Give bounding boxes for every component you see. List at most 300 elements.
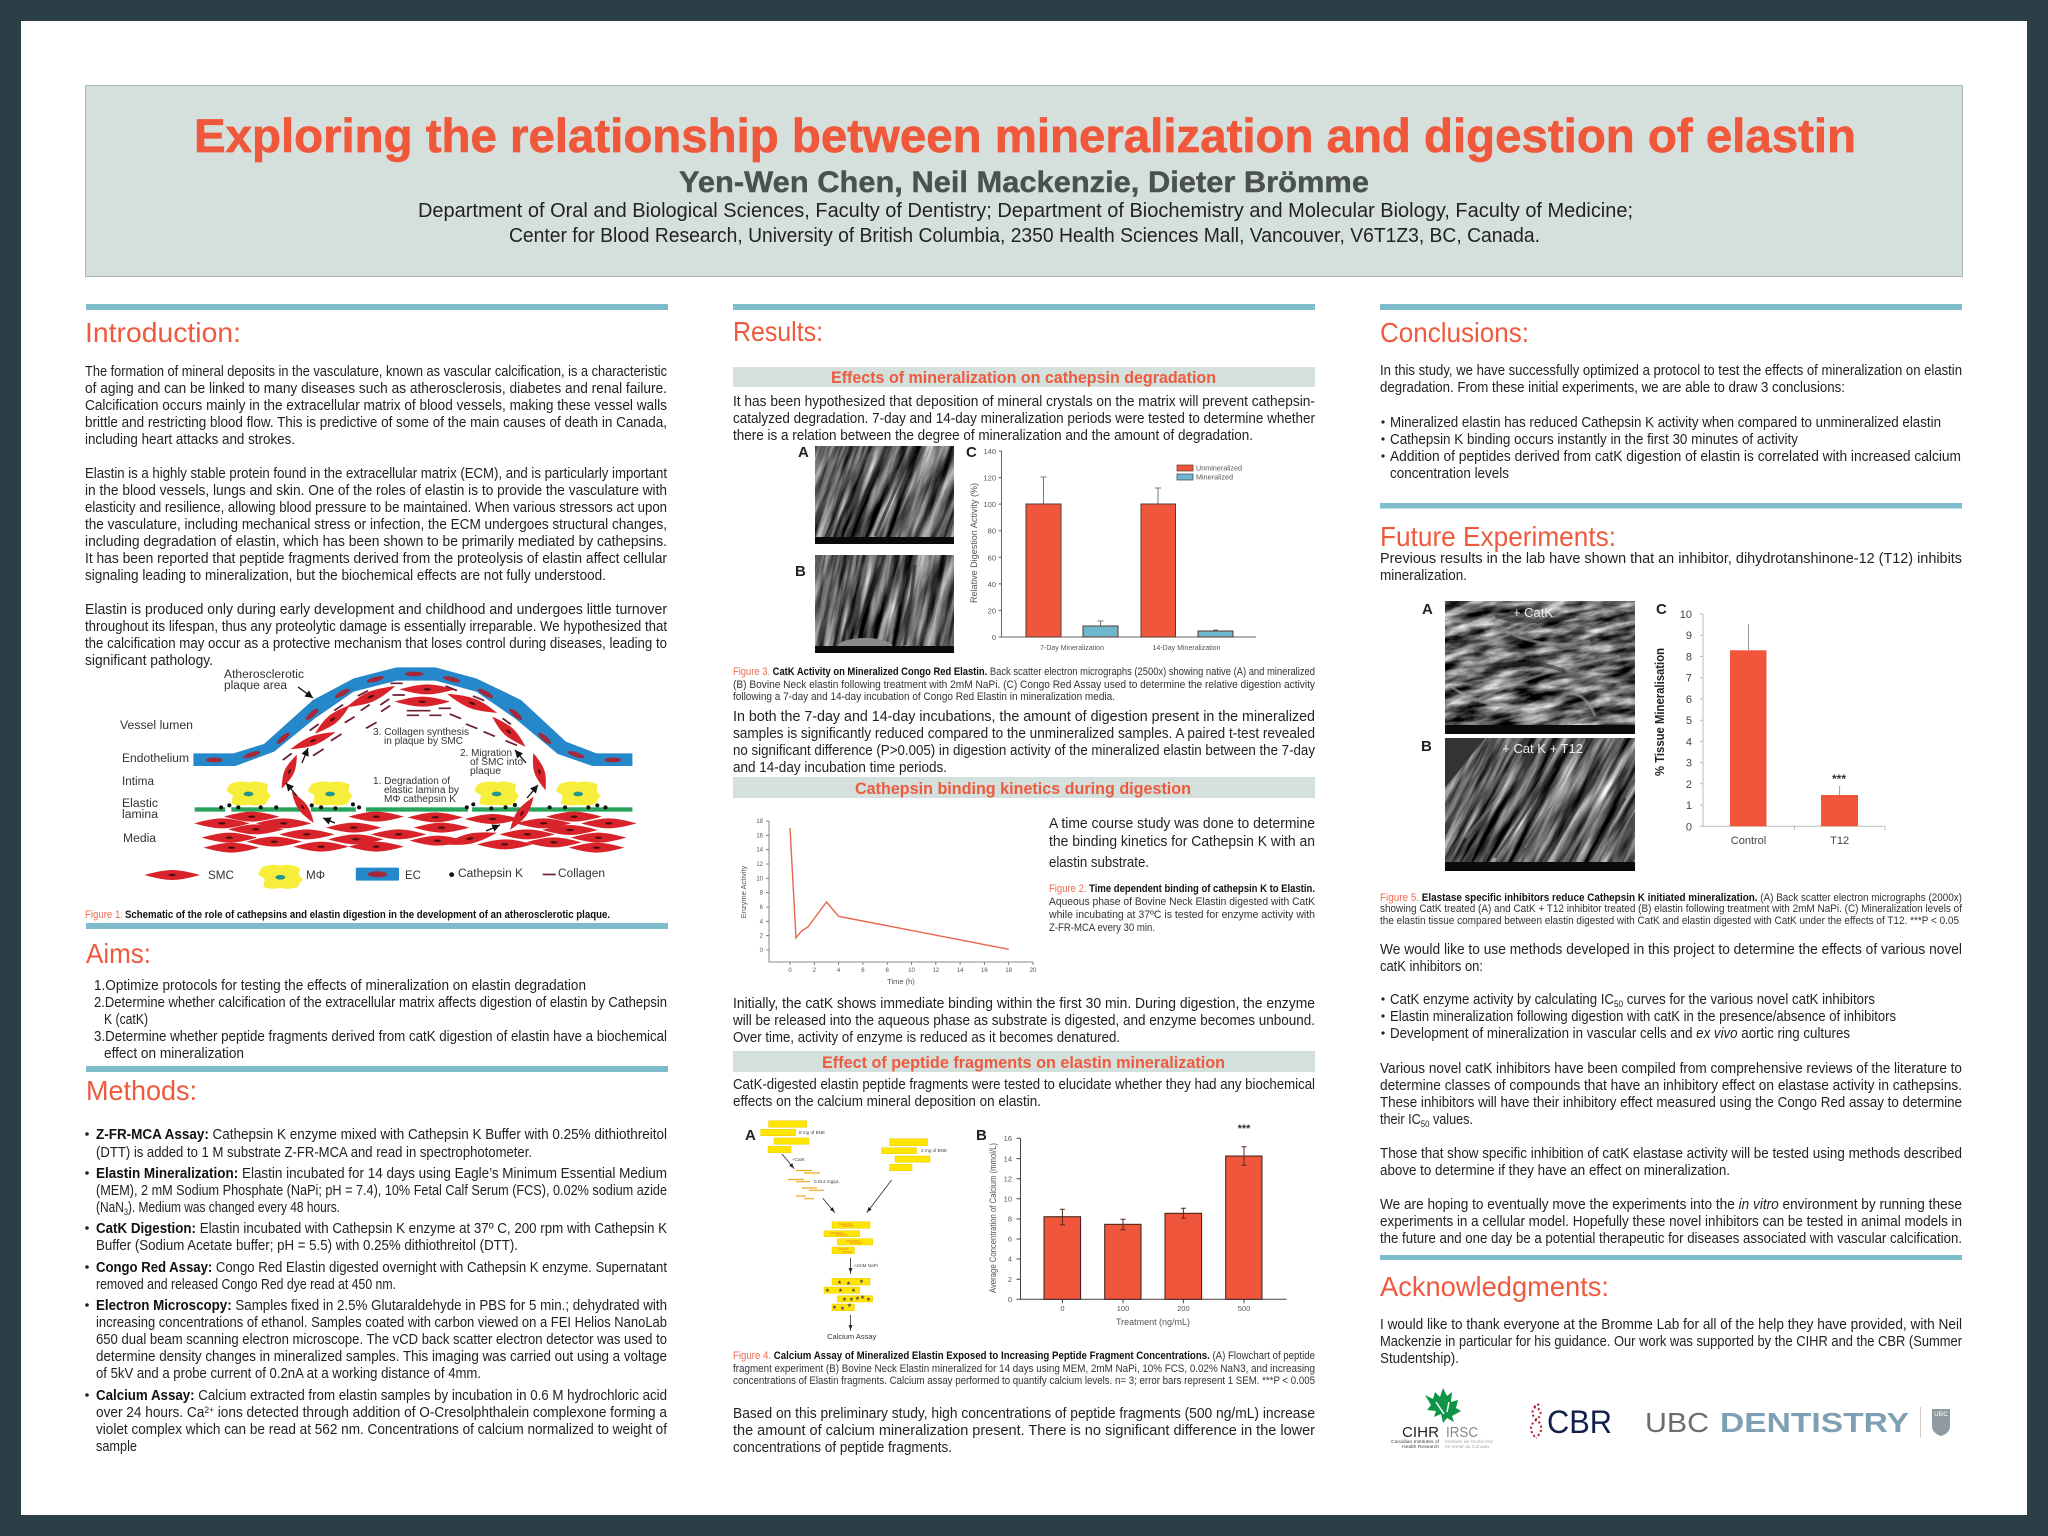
legend — [1177, 464, 1242, 482]
logo: UBC Dentistry: UBC — [1645, 1407, 1709, 1438]
list: conclusions — [1381, 415, 1961, 482]
figure 4B: bar chart: B — [976, 1127, 987, 1144]
text block: incubation findings: no significant difference (P>0.005) in digestion activity of the mineralized elastin between the 7-day — [733, 743, 1316, 759]
figure 4A: flowchart: ★ — [837, 1279, 842, 1286]
labels and arrows: MΦ cathepsin K — [384, 794, 456, 805]
legend: SMC — [208, 870, 234, 882]
list: future aims: Development of mineralization in vascular cells and ex vivo aortic ring cultures — [1390, 1026, 1850, 1042]
caption: figure 3 — [733, 666, 1316, 703]
caption: figure 4: fragment experiment (B) Bovine Neck Elastin mineralized for 14 days using MEM, 2mM NaPi, 10% FCS, 0.02% NaN3, and increasing — [733, 1363, 1315, 1375]
figure 4A: flowchart: ★ — [842, 1296, 847, 1303]
figure 2: line chart: Time (h) — [887, 977, 915, 986]
bar chart C: 0 — [992, 633, 996, 642]
subheading: binding kinetics — [733, 777, 1315, 798]
figure 2: line chart: 14 — [756, 848, 764, 854]
text block: preliminary conclusion: the amount of calcium mineralization present. There is no significant difference in the lower — [733, 1423, 1315, 1439]
figure 2: line chart: 18 — [756, 819, 764, 825]
panel: introduction — [85, 304, 668, 921]
labels and arrows: in plaque by SMC — [384, 736, 463, 747]
bar chart C: C — [1656, 601, 1667, 618]
panel: methods — [85, 1066, 668, 1455]
figure 2: line chart — [739, 819, 1037, 986]
figure 4A: flowchart: ★ — [859, 1278, 864, 1285]
figure 4B: bar chart: 8 — [1008, 1215, 1012, 1224]
figure 4B: bar chart: 14 — [1004, 1154, 1012, 1163]
text block: novel inhibitors — [1380, 1061, 1962, 1129]
micrograph A: CatK: + CatK — [1513, 605, 1553, 620]
list: methods: Congo Red Assay: Congo Red Elastin digested overnight with Cathepsin K enzyme. Supernatant — [96, 1260, 667, 1276]
text block: inhibitor: Previous results in the lab have shown that an inhibitor, dihydrotanshinone-12 (T12) inhibits — [1380, 551, 1962, 567]
micrograph A: A — [798, 444, 809, 461]
figure 5: micrographs and bar chart — [1275, 446, 1885, 1085]
list: methods: 650 dual beam scanning electron microscope. The vCD back scatter electron detector was used to — [96, 1332, 667, 1348]
text block: introduction paragraphs: in the blood vessels, lungs and skin. One of the roles of elastin is to provide the vasculature with — [85, 483, 667, 499]
caption: figure 3: following a 7-day and 14-day incubation of Congo Red Elastin in mineralization media. — [733, 691, 1115, 703]
caption: figure 5: Figure 5. Elastase specific inhibitors reduce Cathepsin K initiated mineralization. (A) Back scatter electron micrographs (2000x) — [1380, 892, 1962, 904]
text block: in vitro: experiments in a cellular model. Hopefully these novel inhibitors can be tested in animal models in — [1380, 1214, 1962, 1230]
labels and arrows: plaque — [470, 766, 501, 777]
text block: acknowledgments — [1380, 1317, 1962, 1367]
labels and arrows: plaque area — [224, 680, 288, 692]
figure 4A: flowchart: ★ — [838, 1287, 843, 1294]
text block: introduction paragraphs: of aging and can be linked to many diseases such as atherosclerosis, diabetes and renal failure. — [85, 381, 667, 397]
elastic lamina — [195, 807, 632, 812]
text block: introduction paragraphs: including heart attacks and strokes. — [85, 432, 295, 448]
bar chart C: 14-Day Mineralization — [1152, 643, 1220, 652]
endothelium — [193, 667, 632, 766]
text block: conclusions intro — [1380, 363, 1962, 396]
panel: future experiments — [1275, 446, 1962, 1247]
list: methods: Z-FR-MCA Assay: Cathepsin K enzyme mixed with Cathepsin K Buffer with 0.25% dithiothreitol — [96, 1127, 667, 1143]
figure 4A: flowchart: +CatK — [792, 1157, 806, 1162]
bar chart C: 10 — [1680, 609, 1692, 621]
text block: incubation findings: and 14-day incubation time periods. — [733, 760, 947, 776]
smooth muscle cells — [194, 682, 637, 853]
text block: acknowledgments: Studentship). — [1380, 1351, 1459, 1367]
text block: in vitro: We are hoping to eventually move the experiments into the in vitro environment by running these — [1380, 1197, 1962, 1213]
figure 4A: flowchart: A — [745, 1127, 756, 1144]
legend — [144, 865, 605, 889]
labels and arrows: of SMC into — [470, 757, 523, 768]
figure 2: line chart: 2 — [813, 968, 817, 974]
caption: figure 1: Schematic of the role of cathepsins and elastin digestion in the development of an atherosclerotic plaque. — [125, 909, 610, 921]
figure 4B: bar chart: 2 — [1008, 1275, 1012, 1284]
figure 4A: flowchart: ★ — [840, 1305, 845, 1312]
list: methods: of 5kV and a probe current of 0.2nA at a working distance of 4mm. — [96, 1366, 481, 1382]
logo: CIHR IRSC: Health Research — [1402, 1444, 1440, 1449]
bar chart C: 1 — [1686, 800, 1692, 812]
text block: acknowledgments: I would like to thank everyone at the Bromme Lab for all of the help they have provided, with Neil — [1380, 1317, 1962, 1333]
figure 4B: bar chart: Average Concentration of Calcium (mmol/L) — [988, 1143, 998, 1293]
text block: preliminary conclusion: concentrations of peptide fragments. — [733, 1440, 952, 1456]
list: aims: 1.Optimize protocols for testing the effects of mineralization on elastin degradation — [94, 978, 586, 994]
bar chart C: 2 — [1686, 779, 1692, 791]
caption: figure 3: Figure 3. CatK Activity on Mineralized Congo Red Elastin. Back scatter electron micrographs (2500x) showing native (A) and mineralized — [733, 666, 1315, 678]
text block: incubation findings — [733, 709, 1316, 776]
text block: introduction paragraphs: Elastin is a highly stable protein found in the extracellular matrix (ECM), and is particularly important — [85, 466, 667, 482]
bar chart C: 9 — [1686, 630, 1692, 642]
list: methods: (MEM), 2 mM Sodium Phosphate (NaPi; pH = 7.4), 10% Fetal Calf Serum (FCS), 0.02% sodium azide — [96, 1183, 667, 1199]
caption: figure 4: Figure 4. Calcium Assay of Mineralized Elastin Exposed to Increasing Peptide Fragment Concentrations. (A) Flowchart of peptide — [733, 1350, 1315, 1362]
figure 4A: flowchart — [745, 1121, 947, 1341]
figure 3: micrographs and bar chart — [660, 259, 1256, 826]
figure 2: line chart: 6 — [861, 968, 865, 974]
labels and arrows: Elastic — [122, 798, 158, 810]
list: methods: increasing concentrations of ethanol. Samples coated with carbon viewed on a FEI Helios NanoLab — [96, 1315, 667, 1331]
subheading: binding kinetics: Cathepsin binding kinetics during digestion — [855, 780, 1191, 798]
figure 4A: flowchart: Calcium Assay — [827, 1332, 877, 1341]
text block: introduction paragraphs: brittle and restricting blood flow. This is predictive of some of the main causes of death in Canada, — [85, 415, 667, 431]
heading: acknowledgments: Acknowledgments: — [1380, 1271, 1609, 1302]
macrophages — [226, 781, 601, 806]
list: methods: 3 — [124, 1207, 128, 1217]
legend: Unmineralized — [1196, 464, 1242, 472]
bar chart C: Relative Digestion Activity (%) — [969, 483, 980, 603]
collagen strands — [283, 683, 517, 760]
list: methods: over 24 hours. Ca — [96, 1405, 211, 1421]
micrograph B: CatK + T12: + Cat K + T12 — [1502, 741, 1583, 756]
panel: aims — [86, 923, 668, 1062]
subheading: effects of mineralization — [733, 367, 1315, 387]
heading: introduction: Introduction: — [85, 317, 241, 348]
labels and arrows: Atherosclerotic — [224, 669, 304, 681]
text block: introduction paragraphs: significant pathology. — [85, 653, 213, 669]
logo: UBC Dentistry — [1645, 1407, 1950, 1438]
subheading: effects of mineralization: Effects of mineralization on cathepsin degradation — [831, 369, 1216, 387]
bar chart C: 5 — [1686, 715, 1692, 727]
heading: future experiments: Future Experiments: — [1380, 521, 1616, 552]
legend: Collagen — [558, 868, 605, 880]
text block: introduction paragraphs: elasticity and resilience, allowing blood pressure to be maintained. When various stressors act upon — [85, 500, 667, 516]
text block: incubation findings: In both the 7-day and 14-day incubations, the amount of digestion present in the mineralized — [733, 709, 1315, 725]
micrograph B — [679, 384, 1091, 826]
text block: conclusions intro: degradation. From these initial experiments, we are able to draw 3 conclusions: — [1380, 380, 1845, 396]
list: methods: (NaN — [96, 1200, 130, 1216]
legend: Mineralized — [1196, 472, 1233, 482]
logo: UBC Dentistry: UBC — [1934, 1412, 1949, 1418]
caption: figure 5: the elastin tissue compared between elastin digested with CatK and elastin digested with CatK under the effects of T12. ***P < 0.05 — [1380, 915, 1959, 927]
figure 2: line chart: 2 — [760, 934, 764, 940]
list: future aims: Elastin mineralization following digestion with catK in the presence/absence of inhibitors — [1390, 1009, 1896, 1025]
caption: figure 4 — [733, 1350, 1315, 1387]
text block: enzyme release: will be released into the aqueous phase as substrate is digested, and enzyme becomes unbound. — [732, 1013, 1315, 1029]
caption: figure 2: Z-FR-MCA every 30 min. — [1049, 922, 1155, 934]
logo: CBR: CBR — [1547, 1404, 1612, 1440]
bar chart C: 8 — [1686, 652, 1692, 664]
list: future aims: 50 — [1614, 999, 1623, 1009]
text block: introduction paragraphs: Calcification occurs mainly in the extracellular matrix of blood vessels, making these vessel walls — [85, 398, 667, 414]
heading: results: Results: — [733, 316, 823, 347]
figure 4B: bar chart: 500 — [1238, 1304, 1250, 1313]
list: methods: sample — [96, 1439, 137, 1455]
bar chart C: 140 — [983, 447, 996, 456]
text block: introduction paragraphs: signaling leading to mineralization, but the biochemical effects are not fully understood. — [85, 568, 606, 584]
text block: hypothesis: It has been hypothesized that deposition of mineral crystals on the matrix will prevent cathepsin- — [733, 394, 1315, 410]
text block: future methods: We would like to use methods developed in this project to determine the effects of various novel — [1380, 942, 1962, 958]
list: methods: 2+ — [204, 1405, 214, 1415]
figure 4A: flowchart: ★ — [851, 1287, 856, 1294]
bar chart C: T12 — [1830, 835, 1849, 847]
logo: CIHR IRSC — [1391, 1388, 1494, 1449]
text block: catK elastase: Those that show specific inhibition of catK elastase activity will be tested using methods described — [1380, 1146, 1962, 1162]
list: methods: (DTT) is added to 1 M substrate Z-FR-MCA and read in spectrophotometer. — [96, 1145, 532, 1161]
list: aims: 2.Determine whether calcification of the extracellular matrix affects digestion of elastin by Cathepsin — [94, 995, 667, 1011]
list: conclusions: concentration levels — [1390, 466, 1509, 482]
text block: time course: elastin substrate. — [1049, 854, 1149, 871]
subheading: peptide fragments — [733, 1051, 1315, 1072]
figure 2: line chart: 8 — [886, 968, 890, 974]
figure 2: line chart: 14 — [957, 968, 964, 974]
caption: figure 2: Figure 2. Time dependent binding of cathepsin K to Elastin. — [1049, 883, 1315, 895]
text block: introduction paragraphs: the calcification may occur as a protective mechanism that loses control during diseases, leading to — [85, 636, 667, 652]
figure 2: line chart: 18 — [1005, 968, 1013, 974]
micrograph B: CatK + T12: B — [1421, 738, 1432, 755]
figure 2: line chart: 20 — [1030, 968, 1037, 974]
list: aims: effect on mineralization — [104, 1046, 244, 1062]
bar chart C: 4 — [1686, 736, 1692, 748]
text block: novel inhibitors: their IC — [1380, 1112, 1427, 1128]
list: conclusions: Mineralized elastin has reduced Cathepsin K activity when compared to unmineralized elastin — [1390, 415, 1941, 431]
caption: figure 1: Figure 1. — [85, 909, 123, 921]
affiliations — [418, 200, 1633, 247]
list: future aims — [1381, 992, 1896, 1042]
labels and arrows: Intima — [122, 776, 155, 788]
logo: UBC Dentistry: DENTISTRY — [1720, 1407, 1909, 1438]
text block: inhibitor: mineralization. — [1380, 568, 1467, 584]
figure 4B: bar chart: *** — [1238, 1123, 1251, 1135]
text block: time course: A time course study was done to determine — [1049, 815, 1315, 832]
figure 2: line chart: 12 — [932, 968, 940, 974]
text block: enzyme release: Initially, the catK shows immediate binding within the first 30 min. During digestion, the enzyme — [733, 996, 1315, 1012]
bar chart C: % Tissue Mineralisation — [1652, 648, 1667, 776]
text block: enzyme release: Over time, activity of enzyme is reduced as it becomes denatured. — [733, 1030, 1120, 1046]
figure 4B: bar chart — [976, 1123, 1287, 1327]
text block: enzyme release — [732, 996, 1315, 1046]
cathepsin K dots — [219, 802, 608, 810]
text block: peptide test: effects on the calcium mineral deposition on elastin. — [733, 1094, 1041, 1110]
text block: introduction paragraphs — [85, 364, 667, 669]
text block: introduction paragraphs: throughout its lifespan, thus any proteolytic damage is essentially irreparable. We hypothesized that — [85, 619, 667, 635]
text block: hypothesis: there is a relation between the degree of mineralization and the amount of degradation. — [733, 428, 1253, 444]
figure 2: line chart: 0 — [788, 968, 792, 974]
text block: time course — [1049, 815, 1315, 871]
caption: figure 5: showing CatK treated (A) and CatK + T12 inhibitor treated (B) elastin following treatment with 2mM NaPi. (C) Mineralization levels of — [1380, 903, 1962, 915]
authors: Yen-Wen Chen, Neil Mackenzie, Dieter Brömme — [679, 166, 1369, 199]
bar chart C: Control — [1731, 835, 1766, 847]
caption: figure 2: Aqueous phase of Bovine Neck Elastin digested with CatK — [1049, 896, 1315, 908]
caption: figure 5 — [1380, 892, 1962, 927]
list: methods: Electron Microscopy: Samples fixed in 2.5% Glutaraldehyde in PBS for 5 min.; dehydrated with — [96, 1298, 667, 1314]
bar chart C: 40 — [988, 580, 996, 589]
list: aims — [94, 978, 667, 1062]
text block: introduction paragraphs: the vasculature, including mechanical stress or infection, the ECM undergoes structural changes, — [85, 517, 667, 533]
list: methods: Buffer (Sodium Acetate buffer; pH = 5.5) with 0.25% dithiothreitol (DTT). — [96, 1238, 518, 1254]
figure 4A: flowchart: ★ — [825, 1287, 830, 1294]
subheading: peptide fragments: Effect of peptide fragments on elastin mineralization — [822, 1054, 1225, 1072]
figure 4A: flowchart: ★ — [849, 1296, 854, 1303]
text block: introduction paragraphs: Elastin is produced only during early development and childhood and undergoes little turnover — [85, 602, 667, 618]
caption: figure 2: while incubating at 37ºC is tested for enzyme activity with — [1048, 909, 1315, 921]
list: methods: ). Medium was changed every 48 hours. — [128, 1200, 340, 1216]
labels and arrows: 3. Collagen synthesis — [373, 727, 469, 738]
text block: preliminary conclusion: Based on this preliminary study, high concentrations of peptide fragments (500 ng/mL) increase — [733, 1406, 1315, 1422]
figure 4B: bar chart: Treatment (ng/mL) — [1116, 1317, 1190, 1327]
text block: future methods: catK inhibitors on: — [1380, 959, 1483, 975]
caption: figure 4: concentrations of Elastin fragments. Calcium assay performed to quantify calcium levels. n= 3; error bars represent 1 SEM. ***P < 0.005 — [733, 1375, 1315, 1387]
bar chart C: 20 — [988, 606, 996, 615]
labels and arrows: Vessel lumen — [120, 720, 193, 732]
figure 2: line chart: 8 — [760, 891, 764, 897]
panel: results — [660, 259, 1316, 1456]
text block: in vitro: the future and one day be a potential therapeutic for diseases associated with vascular calcification. — [1380, 1231, 1962, 1247]
text block: hypothesis: catalyzed degradation. 7-day and 14-day mineralization periods were tested to determine whether — [733, 411, 1315, 427]
bar chart C: 7 — [1686, 673, 1692, 685]
figure 4A: flowchart: ★ — [847, 1302, 852, 1309]
figure 4A: flowchart: +2mM NaPi — [854, 1263, 878, 1268]
legend: EC — [405, 870, 421, 882]
figure 4A: flowchart: ★ — [832, 1304, 837, 1311]
figure 2: line chart: 4 — [837, 968, 841, 974]
bar chart C: *** — [1832, 772, 1846, 786]
heading: conclusions: Conclusions: — [1380, 317, 1529, 348]
figure 2: line chart: Enzyme Activity — [739, 865, 748, 918]
micrograph A: CatK — [1296, 446, 1785, 895]
micrograph B: CatK + T12 — [1275, 527, 1812, 1085]
text block: novel inhibitors: 50 — [1421, 1119, 1429, 1129]
affiliations: Center for Blood Research, University of British Columbia, 2350 Health Sciences Mall, Vancouver, V6T1Z3, BC, Canada. — [509, 225, 1540, 247]
labels and arrows: 2. Migration — [460, 748, 512, 759]
figure 4B: bar chart: 10 — [1004, 1194, 1012, 1204]
text block: in vitro — [1380, 1197, 1962, 1247]
figure 4A: flowchart: 0.014 mg/µL — [814, 1179, 840, 1184]
micrograph A — [660, 259, 1110, 733]
caption: figure 3: (B) Bovine Neck elastin following treatment with 2mM NaPi. (C) Congo Red Assay used to determine the relative digestion activity — [733, 679, 1316, 691]
micrograph A: CatK: A — [1422, 601, 1433, 618]
list: methods — [85, 1127, 668, 1455]
labels and arrows: lamina — [122, 809, 159, 821]
list: future aims: curves for the various novel catK inhibitors — [1623, 992, 1875, 1008]
figure 4B: bar chart: 12 — [1004, 1174, 1012, 1183]
figure 2: line chart: 6 — [760, 905, 764, 911]
bar chart C: 120 — [983, 474, 996, 483]
labels and arrows: 1. Degradation of — [373, 776, 450, 787]
list: methods: violet complex which can be read at 562 nm. Concentrations of calcium normalized to weight of — [96, 1422, 668, 1438]
list: methods: Elastin Mineralization: Elastin incubated for 14 days using Eagle’s Minimum Essential Medium — [96, 1166, 667, 1182]
figure 4B: bar chart: 4 — [1008, 1255, 1012, 1264]
figure 4A: flowchart: 8 mg of BNE — [799, 1130, 825, 1135]
figure 2: line chart: 16 — [756, 833, 764, 839]
legend: Cathepsin K — [458, 868, 523, 880]
list: methods: ions detected through addition of O-Cresolphthalein complexone forming a — [214, 1405, 668, 1421]
labels and arrows: Media — [123, 833, 157, 845]
text block: conclusions intro: In this study, we have successfully optimized a protocol to test the effects of mineralization on elastin — [1380, 363, 1962, 379]
figure 4B: bar chart: 0 — [1008, 1295, 1012, 1304]
logo: CIHR IRSC: Canadian Institutes of — [1391, 1439, 1440, 1444]
list: aims: K (catK) — [104, 1012, 148, 1028]
figure 4A: flowchart: ★ — [855, 1295, 860, 1302]
text block: hypothesis — [733, 394, 1315, 444]
text block: preliminary conclusion — [733, 1406, 1315, 1456]
text block: introduction paragraphs: including degradation of elastin, which has been shown to be primarily mediated by cathepsins. — [85, 534, 667, 550]
text block: future methods — [1380, 942, 1962, 975]
heading: methods: Methods: — [86, 1075, 197, 1106]
list: methods: CatK Digestion: Elastin incubated with Cathepsin K enzyme at 37º C, 200 rpm with Cathepsin K — [96, 1221, 667, 1237]
panel: acknowledgments — [1380, 1255, 1962, 1449]
figure 4A: flowchart: ★ — [846, 1280, 851, 1287]
labels and arrows: elastic lamina by — [384, 785, 459, 796]
figure 4B: bar chart: 16 — [1004, 1134, 1012, 1143]
text block: catK elastase — [1380, 1146, 1962, 1179]
logo: CIHR IRSC: en santé du Canada — [1445, 1444, 1490, 1449]
text block: peptide test — [733, 1077, 1315, 1110]
text block: incubation findings: samples is significantly reduced compared to the unmineralized samples. A paired t-test revealed — [733, 726, 1315, 742]
text block: acknowledgments: Mackenzie in particular for his guidance. Our work was supported by the CIHR and the CBR (Summer — [1380, 1334, 1962, 1350]
bar chart C: 0 — [1686, 821, 1692, 833]
figure 1: atherosclerotic plaque schematic — [120, 667, 637, 889]
labels and arrows — [120, 669, 538, 845]
legend: MΦ — [306, 870, 325, 882]
logo: CIHR IRSC: IRSC — [1446, 1424, 1478, 1441]
figure 4B: bar chart: 100 — [1117, 1304, 1129, 1313]
panel: conclusions — [1380, 304, 1962, 482]
caption: figure 2 — [1048, 883, 1315, 934]
logo: CIHR IRSC: CIHR — [1402, 1424, 1439, 1441]
text block: catK elastase: above to determine if they have an effect on mineralization. — [1380, 1163, 1730, 1179]
logo: CIHR IRSC: Instituts de recherche — [1445, 1439, 1494, 1444]
heading: aims: Aims: — [86, 938, 151, 969]
text block: peptide test: CatK-digested elastin peptide fragments were tested to elucidate whether they had any biochemical — [733, 1077, 1315, 1093]
figure 4B: bar chart: 0 — [1060, 1304, 1064, 1313]
bar chart C: 6 — [1686, 694, 1692, 706]
list: aims: 3.Determine whether peptide fragments derived from catK digestion of elastin have a biochemical — [94, 1029, 667, 1045]
bar chart C — [1652, 601, 1885, 847]
list: future aims: CatK enzyme activity by calculating IC — [1390, 992, 1636, 1008]
title: Exploring the relationship between mineralization and digestion of elastin — [194, 109, 1856, 162]
figure 4A: flowchart: ★ — [866, 1296, 871, 1303]
text block: novel inhibitors: These inhibitors will have their inhibitory effect measured using the Congo Red assay to determine — [1380, 1095, 1962, 1111]
bar chart C — [966, 444, 1256, 652]
text block: novel inhibitors: values. — [1429, 1112, 1473, 1128]
text block: novel inhibitors: determine classes of compounds that have an inhibitory effect on elastase activity in cathepsins. — [1380, 1078, 1962, 1094]
figure 4A: flowchart: ★ — [860, 1294, 865, 1301]
list: methods: Calcium Assay: Calcium extracted from elastin samples by incubation in 0.6 M hydrochloric acid — [96, 1388, 667, 1404]
figure 2: line chart: 0 — [760, 948, 764, 954]
micrograph B: B — [795, 563, 806, 580]
bar chart C: 3 — [1686, 758, 1692, 770]
list: conclusions: Cathepsin K binding occurs instantly in the first 30 minutes of activity — [1390, 432, 1799, 448]
bar chart C: 80 — [988, 527, 996, 536]
figure 2: line chart: 10 — [756, 876, 764, 882]
affiliations: Department of Oral and Biological Sciences, Faculty of Dentistry; Department of Biochemistry and Molecular Biology, Faculty of Medicine; — [418, 200, 1633, 222]
text block: introduction paragraphs: It has been reported that peptide fragments derived from the proteolysis of elastin affect cellular — [85, 551, 667, 567]
text block: introduction paragraphs: The formation of mineral deposits in the vasculature, known as vascular calcification, is a characteristic — [85, 364, 667, 380]
figure 2: line chart: 10 — [908, 968, 915, 974]
list: methods: determine density changes in mineralized samples. This imaging was carried out using a voltage — [96, 1349, 667, 1365]
text block: time course: the binding kinetics for Cathepsin K with an — [1049, 833, 1315, 850]
text block: novel inhibitors: Various novel catK inhibitors have been compiled from comprehensive reviews of the literature to — [1380, 1061, 1962, 1077]
list: conclusions: Addition of peptides derived from catK digestion of elastin is correlated with increased calcium — [1390, 449, 1961, 465]
figure 4B: bar chart: 200 — [1177, 1304, 1190, 1313]
figure 2: line chart: 12 — [756, 862, 764, 868]
text block: inhibitor — [1380, 551, 1962, 584]
figure 4B: bar chart: 6 — [1008, 1235, 1012, 1244]
figure 2: line chart: 4 — [760, 919, 764, 925]
figure 2: line chart: 16 — [981, 968, 988, 974]
list: methods: removed and released Congo Red dye read at 450 nm. — [96, 1277, 396, 1293]
figure 4A: flowchart: 3 mg of BNE — [921, 1148, 947, 1153]
bar chart C: 60 — [988, 553, 996, 562]
title banner — [86, 86, 1962, 276]
